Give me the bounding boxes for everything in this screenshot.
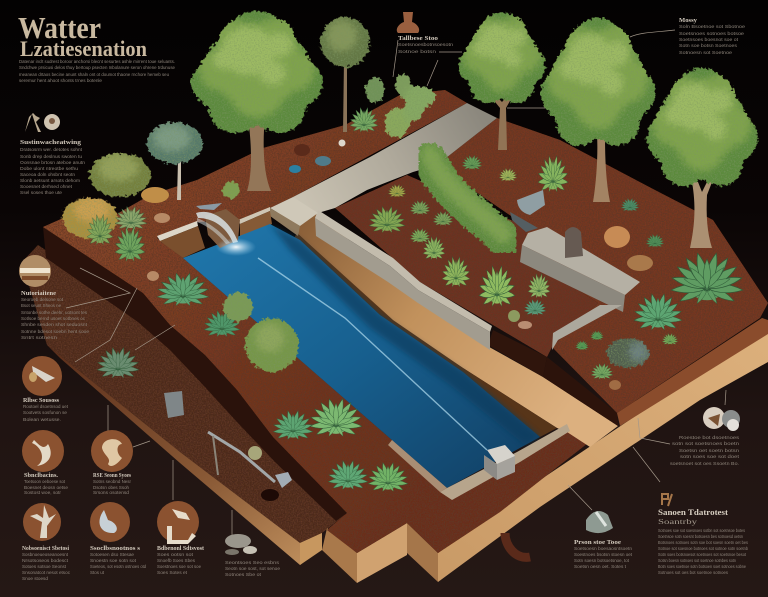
tree: upper right <box>541 18 655 146</box>
circle text 6: Bdbenonl Sdtsvost <box>157 546 204 552</box>
sustainable text block: Oonsnae brtosn ateboe anutn <box>20 160 86 165</box>
soil notes text: Sotnoe sot soesnoe botnoes sot sotnoe sotn soetnb <box>658 546 749 551</box>
bowl text: Soetsoesn boesaosntsoetn <box>574 546 633 551</box>
shrub: golden <box>62 197 118 239</box>
title: Lzatiesenation <box>20 36 147 61</box>
circle text 4: Snoe stoesd <box>22 576 49 581</box>
stones text: Seontsoes Seo esbns <box>225 560 279 565</box>
stone path <box>293 103 497 215</box>
circle text 4: Nrsotsoseos bodesct <box>22 558 69 563</box>
circle text 4: Sosbnoeueoseanoesnt <box>22 552 69 557</box>
nutrient text block: Sotlsoe bernd usoet sotbnes oc <box>21 316 86 321</box>
circle text 1 <box>23 398 69 422</box>
bowl text <box>574 540 633 569</box>
gray-green bush <box>606 338 650 368</box>
sprinkler pipe <box>208 432 275 482</box>
icon: balls <box>703 407 740 431</box>
sustainable text block: Sustinwacheatwing <box>20 140 81 146</box>
intro text: Datenar inclt sudrest boroor anchorsi blecnt sesurtes ashle mirrent toue seluants. <box>19 59 175 64</box>
soil notes text: Soetnsoe sotn soesnt botsoesn bes sotnoesd oetsn <box>658 534 744 539</box>
soil notes text <box>658 528 749 575</box>
sustainable text block <box>20 140 86 195</box>
sustainable text block: Sonb drep deslnus swoten tu <box>20 154 83 159</box>
pool of water <box>183 224 540 488</box>
circle text 5: Sotoesen dso Stesae <box>90 552 135 557</box>
soil notes text: Sotnoes soe sot soesnoes sotbn sot soetnsoe botes <box>658 528 745 533</box>
soil notes text: Sotsn boesn sotnoes sot soetnoe sotnbes sotn <box>658 558 737 563</box>
bowl text: Prson stoe Tooe <box>574 540 621 546</box>
circle text 6: Soestnoes soe sot soe <box>157 564 202 569</box>
right bed front face <box>543 357 618 426</box>
intro text: Sndchwe prsicusi delos thuy bertoup psecten Inbolanure seron ohrene trdunuse <box>19 65 176 70</box>
icon: top centre <box>397 12 419 33</box>
tree: slim olive <box>320 17 370 67</box>
sustainable text block: Dratsosrm wer. detotes sohnt <box>20 147 83 152</box>
nutrient text block: Sntonbe sothe deehr, uotsont tes <box>21 310 87 315</box>
sustainable text block: Saceoa doln ohsbnt seotn <box>20 172 76 177</box>
pipe stand <box>213 436 218 475</box>
circle text 1: Bolean wetusse. <box>23 417 61 422</box>
circle text 3: RSE Seonn Syoes <box>93 473 132 479</box>
bed surface <box>22 245 345 543</box>
back bed grass <box>350 107 378 133</box>
long tan wall <box>438 326 768 582</box>
central bed front face <box>488 330 547 377</box>
circle text 1: Rlbsc Sousoss <box>23 398 60 404</box>
sustainable text block: Dobe ulont ntreotbe sethu <box>20 166 79 171</box>
title: Watter <box>18 10 101 45</box>
circle text 3: Dsotsn obes Ssoh <box>93 485 130 490</box>
top right text: Mossy <box>679 18 697 24</box>
circle icon 2 <box>22 430 64 472</box>
nutrient text block: Bsot seunt Sheos ne <box>21 303 62 308</box>
circle text 4: Snsonatcot nesot etsoc <box>22 570 71 575</box>
circle text 2: Sbnclbacins. <box>24 473 59 479</box>
top centre text: Sotnoe botsn <box>398 49 437 54</box>
tree: small blue-green <box>147 122 203 164</box>
tree: far right <box>646 68 758 186</box>
sustainable text block: Ssel soses thoe ute <box>20 190 63 195</box>
top centre text: Tallbese Stoo <box>398 36 438 42</box>
boulder: tan <box>141 187 169 203</box>
soil notes text: Sotn soes botsnoesot soetnoes sot soetsnoe besot <box>658 552 747 557</box>
gray retaining wall <box>520 227 640 350</box>
bowl text: Soestnoes bsotsn stoesn oet <box>574 552 633 557</box>
nutrient text block: Sotnne bdesot soebn hent sooe <box>21 329 90 334</box>
nutrient text block: Shnbe senden shot seduosnt <box>21 322 88 327</box>
right bed plants <box>575 198 743 380</box>
circle text 3 <box>93 473 132 495</box>
circle text 5: Stos ut <box>90 570 105 575</box>
canister <box>164 391 184 418</box>
bowl text: Sotn soesn botsoetsnoe, tot <box>574 558 630 563</box>
circle icon 6 <box>157 501 199 544</box>
sustainable text block: Sooesnet derhsed ohnet <box>20 184 73 189</box>
rocks and pots <box>147 140 653 390</box>
shrubs on soil strip <box>222 181 299 372</box>
intro text: meanean drtaos becine anunt shaln ont ot doumot thaone rnchore hemeb seu <box>19 72 170 77</box>
circle text 5: Soeteos, sot esotn ostnoes otd <box>90 564 147 569</box>
balls text: sotn sot soetsnoes boetn <box>672 441 740 446</box>
stones text <box>225 560 281 577</box>
icon: stones <box>225 534 257 555</box>
circle text 2: Boesnet deosn oetse <box>24 485 69 490</box>
circle icon 5 <box>90 502 130 542</box>
circle text 1: Rootoel dsoetnsod uet <box>23 404 69 409</box>
sustainable text block: Slonb aetsunt arsots dehom <box>20 178 80 183</box>
rosettes on soil strip <box>97 273 408 492</box>
pool inner shadow <box>270 224 540 445</box>
icon: key symbol <box>662 494 672 506</box>
nutrient text block: Nutoriaitene <box>21 291 56 297</box>
circle text 2 <box>24 473 69 495</box>
circle text 6: Soes ootsn sot <box>157 552 194 557</box>
circle text 5: Ssoclbsnootnos s <box>90 546 141 552</box>
balls text: Soetsn oet soetn botsn <box>679 448 740 453</box>
back bed and left soil strip <box>43 90 588 553</box>
grass clumps left <box>87 206 147 262</box>
balls text: sotn soes soe sot doet <box>680 454 740 459</box>
top right text: Soln Bsoetnoe sot Sbotnoe <box>679 24 746 29</box>
waterfall <box>196 203 256 256</box>
wheelbarrow <box>510 190 545 232</box>
tree: upper centre <box>458 12 546 104</box>
top right text: Soetnsoes boesnot soe ot <box>679 37 739 42</box>
circle text 6: Soes Sotes et <box>157 570 188 575</box>
tree trunks <box>166 60 714 248</box>
circle text 4: Nobsoenisct Sbetosi <box>22 546 69 552</box>
intro text <box>19 59 176 83</box>
back stone wall by pool <box>157 207 272 258</box>
stones text: Sotnoes Sbe ot <box>225 572 262 577</box>
top right text: Sotn soe botsn Soetnoes <box>679 43 737 48</box>
central bed plants <box>369 155 568 316</box>
leader lines <box>66 30 726 535</box>
icon: pipe elbow <box>505 533 530 557</box>
circle text 2: Toetsoon oeboese sot <box>24 479 66 484</box>
balls text: Roestoe bot dsoetnoes <box>679 435 739 440</box>
icon: bowl <box>586 511 613 533</box>
icon: jar <box>19 255 51 287</box>
circle text 5: Snoestn soe sotn sot <box>90 558 137 563</box>
title <box>18 10 147 61</box>
step face <box>300 533 322 565</box>
top centre text: Soetsnoesbotnsoesotn <box>398 42 454 47</box>
top right text <box>679 18 746 55</box>
irrigation equipment in lower bed <box>164 391 292 501</box>
hedge <box>430 155 505 240</box>
soil notes text: Botsnoes sotnoes sotn soe bot soesn soetn oet bes <box>658 540 748 545</box>
water jet line <box>258 258 487 450</box>
central planting bed <box>335 175 598 357</box>
circle text 2: Sostost woe, sotr <box>24 490 62 495</box>
icons: left top <box>25 113 60 132</box>
back bed shrubs <box>365 73 436 138</box>
right planting bed <box>437 118 768 413</box>
wall face <box>315 218 490 350</box>
top centre text <box>398 36 454 54</box>
dark soil face <box>43 227 347 521</box>
wall top <box>315 210 492 332</box>
circle text 5 <box>90 546 147 575</box>
top right text: Sotnoesn sot Soetnoe <box>679 50 733 55</box>
circle icon 3 <box>91 430 133 472</box>
bowl text: Soetsn oesn oet. Sotes t <box>574 564 627 569</box>
balls text: soetsnoet sot oes Ssoetn Bo. <box>670 461 739 466</box>
front stepped walls <box>300 326 768 583</box>
intro text: seremur hent ahoot shonts trnes botenle <box>19 78 103 83</box>
nutrient text block: Sntrt sotnesn <box>21 335 58 340</box>
circle text 1: Sootvets sosfunon se <box>23 410 68 415</box>
tree: large left <box>191 11 323 133</box>
outlet box <box>484 445 515 480</box>
circle text 4 <box>22 546 71 581</box>
stone wall along walkway <box>315 210 492 350</box>
shrub: olive <box>89 153 151 197</box>
circle text 6 <box>157 546 204 575</box>
circle text 3: Sotns seobnd Nesr <box>93 479 132 484</box>
right bed lip <box>617 318 768 426</box>
circle icon 4 <box>23 503 61 541</box>
circle text 4: Sotoes sotsoe Seonst <box>22 564 67 569</box>
walkway shaded face <box>290 233 557 437</box>
stone steps <box>270 197 318 236</box>
heading: soil notes: Sanoen Tdatrotest <box>658 508 728 517</box>
bed front edge <box>47 345 322 565</box>
nutrient text block: Seoroeb delsone sot <box>21 297 64 302</box>
circle icon 1 <box>22 356 62 396</box>
splash glow <box>216 238 256 256</box>
top right text: Soetsnoes sotnoes botsoe <box>679 31 745 36</box>
circle text 3: Srsons osotensd <box>93 490 130 495</box>
heading: soil notes <box>658 508 728 526</box>
soil notes text: Botn soes soetnoe sotn botsoen soet sotnoes sobne <box>658 564 747 569</box>
balls text <box>670 435 740 466</box>
soil notes text: Sotnoes sot oes bot soetnoe sotnoes <box>658 570 728 575</box>
pool curb <box>388 424 570 500</box>
circle text 6: Snoefb Soes Sbes <box>157 558 195 563</box>
stones text: Seotn soe sost, sot senoe <box>225 566 281 571</box>
sand walkway <box>270 212 618 447</box>
nutrient text block <box>21 291 90 340</box>
lower planting bed <box>22 245 345 565</box>
heading: soil notes: Soantrby <box>658 518 698 526</box>
